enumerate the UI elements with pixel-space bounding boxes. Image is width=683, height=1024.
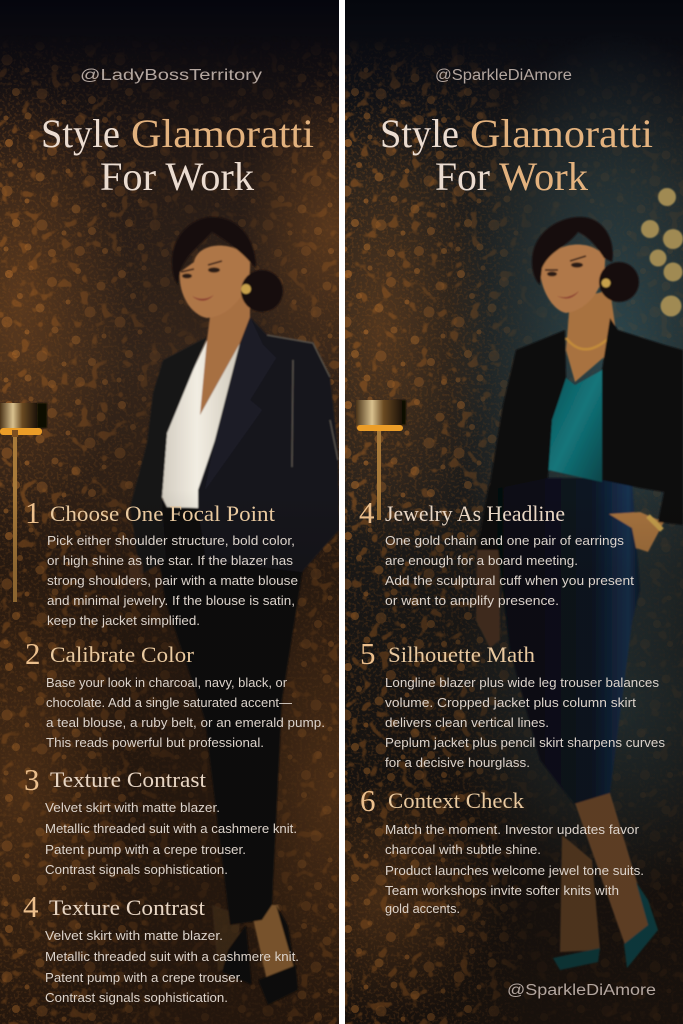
tip 6: Context Check: gold accents. <box>385 901 460 916</box>
head <box>172 217 283 318</box>
tip 5: Silhouette Math: Peplum jacket plus pencil skirt sharpens curves <box>385 735 666 750</box>
tip 4: Jewelry As Headline: Add the sculptural cuff when you present <box>385 573 634 588</box>
tip 6: Context Check: Product launches welcome jewel tone suits. <box>385 863 644 878</box>
background: teal and gold glitter wall <box>345 0 683 1024</box>
lapel <box>205 317 276 490</box>
tip 4: Texture Contrast (repeat): Contrast signals sophistication. <box>45 990 228 1005</box>
tip 3: Texture Contrast: Texture Contrast <box>50 767 206 792</box>
tip 4: Jewelry As Headline <box>359 495 634 608</box>
head <box>532 217 639 313</box>
sleeve highlight <box>267 335 338 467</box>
title: right panel <box>380 111 653 199</box>
tip 4: Jewelry As Headline: or want to amplify presence. <box>385 593 559 608</box>
legs and heels <box>553 793 658 970</box>
handle: LadyBossTerritory: @LadyBossTerritory <box>80 67 262 84</box>
tip 2: Calibrate Color: 2 <box>25 636 40 671</box>
tip 1: Choose One Focal Point: strong shoulders, pair with a matte blouse <box>47 573 298 588</box>
tip 5: Silhouette Math: for a decisive hourglass. <box>385 755 530 770</box>
tip 2: Calibrate Color: a teal blouse, a ruby belt, or an emerald pump. <box>46 715 325 730</box>
tip 3: Texture Contrast: 3 <box>24 762 40 797</box>
tip 6: Context Check <box>360 783 644 916</box>
tip 2: Calibrate Color <box>25 636 325 750</box>
tip 1: Choose One Focal Point: 1 <box>25 495 40 530</box>
legs and feet <box>212 905 298 1005</box>
handle: SparkleDiAmore bottom: @SparkleDiAmore <box>507 982 656 999</box>
tip 3: Texture Contrast: Velvet skirt with matte blazer. <box>45 800 220 815</box>
tip 6: Context Check: Team workshops invite softer knits with <box>385 883 619 898</box>
tip 4: Jewelry As Headline: Jewelry As Headline <box>385 501 565 526</box>
tip 3: Texture Contrast: Metallic threaded suit with a cashmere knit. <box>45 821 297 836</box>
hand <box>129 555 143 589</box>
tip 4: Texture Contrast (repeat): Texture Contrast <box>49 895 205 920</box>
tip 2: Calibrate Color: Calibrate Color <box>50 642 195 667</box>
title: right panel: Style <box>380 111 459 156</box>
tip 4: Jewelry As Headline: 4 <box>359 495 375 530</box>
tip 3: Texture Contrast: Patent pump with a crepe trouser. <box>45 842 246 857</box>
title: left panel: For Work <box>100 154 254 199</box>
cropped jacket <box>602 318 683 525</box>
background: dark glitter wall <box>0 0 339 1024</box>
tip 4: Texture Contrast (repeat): Velvet skirt with matte blazer. <box>45 928 223 943</box>
tip 6: Context Check: charcoal with subtle shine. <box>385 842 541 857</box>
title: right panel: For <box>435 154 490 199</box>
icon: floor lamp <box>0 403 47 602</box>
tip 4: Texture Contrast (repeat): 4 <box>23 889 39 924</box>
velvet skirt <box>497 478 640 804</box>
tip 6: Context Check: Match the moment. Investor updates favor <box>385 822 640 837</box>
figure: woman in charcoal blazer and white blouse <box>129 217 339 1005</box>
tip 5: Silhouette Math: delivers clean vertical lines. <box>385 715 549 730</box>
tip 6: Context Check: Context Check <box>388 788 524 813</box>
sleeve below jacket <box>476 485 500 550</box>
tip 2: Calibrate Color: This reads powerful but professional. <box>46 735 264 750</box>
title: right panel: Work <box>499 154 588 199</box>
title: left panel: Glamoratti <box>131 111 314 156</box>
figure: woman in cropped jacket, teal blouse and velvet skirt <box>476 217 683 970</box>
tip 2: Calibrate Color: Base your look in charcoal, navy, black, or <box>46 675 288 690</box>
title: left panel: Style <box>41 111 120 156</box>
panel: right, SparkleDiAmore <box>345 0 683 1024</box>
tip 1: Choose One Focal Point: Choose One Focal Point <box>50 501 275 526</box>
panel: left, LadyBossTerritory <box>0 0 339 1024</box>
tip 4: Texture Contrast (repeat): Patent pump with a crepe trouser. <box>45 970 243 985</box>
tip 2: Calibrate Color: chocolate. Add a single saturated accent— <box>46 695 292 710</box>
tip 4: Jewelry As Headline: One gold chain and one pair of earrings <box>385 533 625 548</box>
gold bokeh lights <box>641 188 683 316</box>
neck and chest <box>199 295 252 415</box>
tip 1: Choose One Focal Point <box>25 495 298 628</box>
tip 5: Silhouette Math: Longline blazer plus wide leg trouser balances <box>385 675 660 690</box>
tip 4: Jewelry As Headline: are enough for a board meeting. <box>385 553 578 568</box>
tip 1: Choose One Focal Point: keep the jacket simplified. <box>47 613 200 628</box>
blouse <box>162 340 240 508</box>
necklace <box>566 335 612 349</box>
tip 5: Silhouette Math: volume. Cropped jacket plus column skirt <box>385 695 636 710</box>
handle: SparkleDiAmore top: @SparkleDiAmore <box>435 67 572 84</box>
tip 6: Context Check: 6 <box>360 783 376 818</box>
tip 3: Texture Contrast <box>24 762 297 877</box>
tip 5: Silhouette Math: 5 <box>360 636 376 671</box>
tip 4: Texture Contrast (repeat) <box>23 889 299 1005</box>
tip 1: Choose One Focal Point: Pick either shoulder structure, bold color, <box>47 533 295 548</box>
tip 5: Silhouette Math: Silhouette Math <box>388 642 535 667</box>
tip 5: Silhouette Math <box>360 636 666 770</box>
hand on hip <box>609 512 664 552</box>
tip 3: Texture Contrast: Contrast signals sophistication. <box>45 862 228 877</box>
trousers <box>159 500 304 925</box>
teal blouse <box>548 370 602 482</box>
text scrim <box>345 490 683 1024</box>
neck <box>566 290 618 382</box>
text scrim <box>0 490 339 1024</box>
icon: floor lamp <box>356 400 406 520</box>
title: left panel <box>41 111 314 199</box>
tip 4: Texture Contrast (repeat): Metallic threaded suit with a cashmere knit. <box>45 949 299 964</box>
bracelet <box>648 516 662 530</box>
arm and hand <box>476 547 500 648</box>
title: right panel: Glamoratti <box>470 111 653 156</box>
tip 1: Choose One Focal Point: or high shine as the star. If the blazer has <box>47 553 294 568</box>
blazer <box>198 317 339 572</box>
tip 1: Choose One Focal Point: and minimal jewelry. If the blouse is satin, <box>47 593 295 608</box>
